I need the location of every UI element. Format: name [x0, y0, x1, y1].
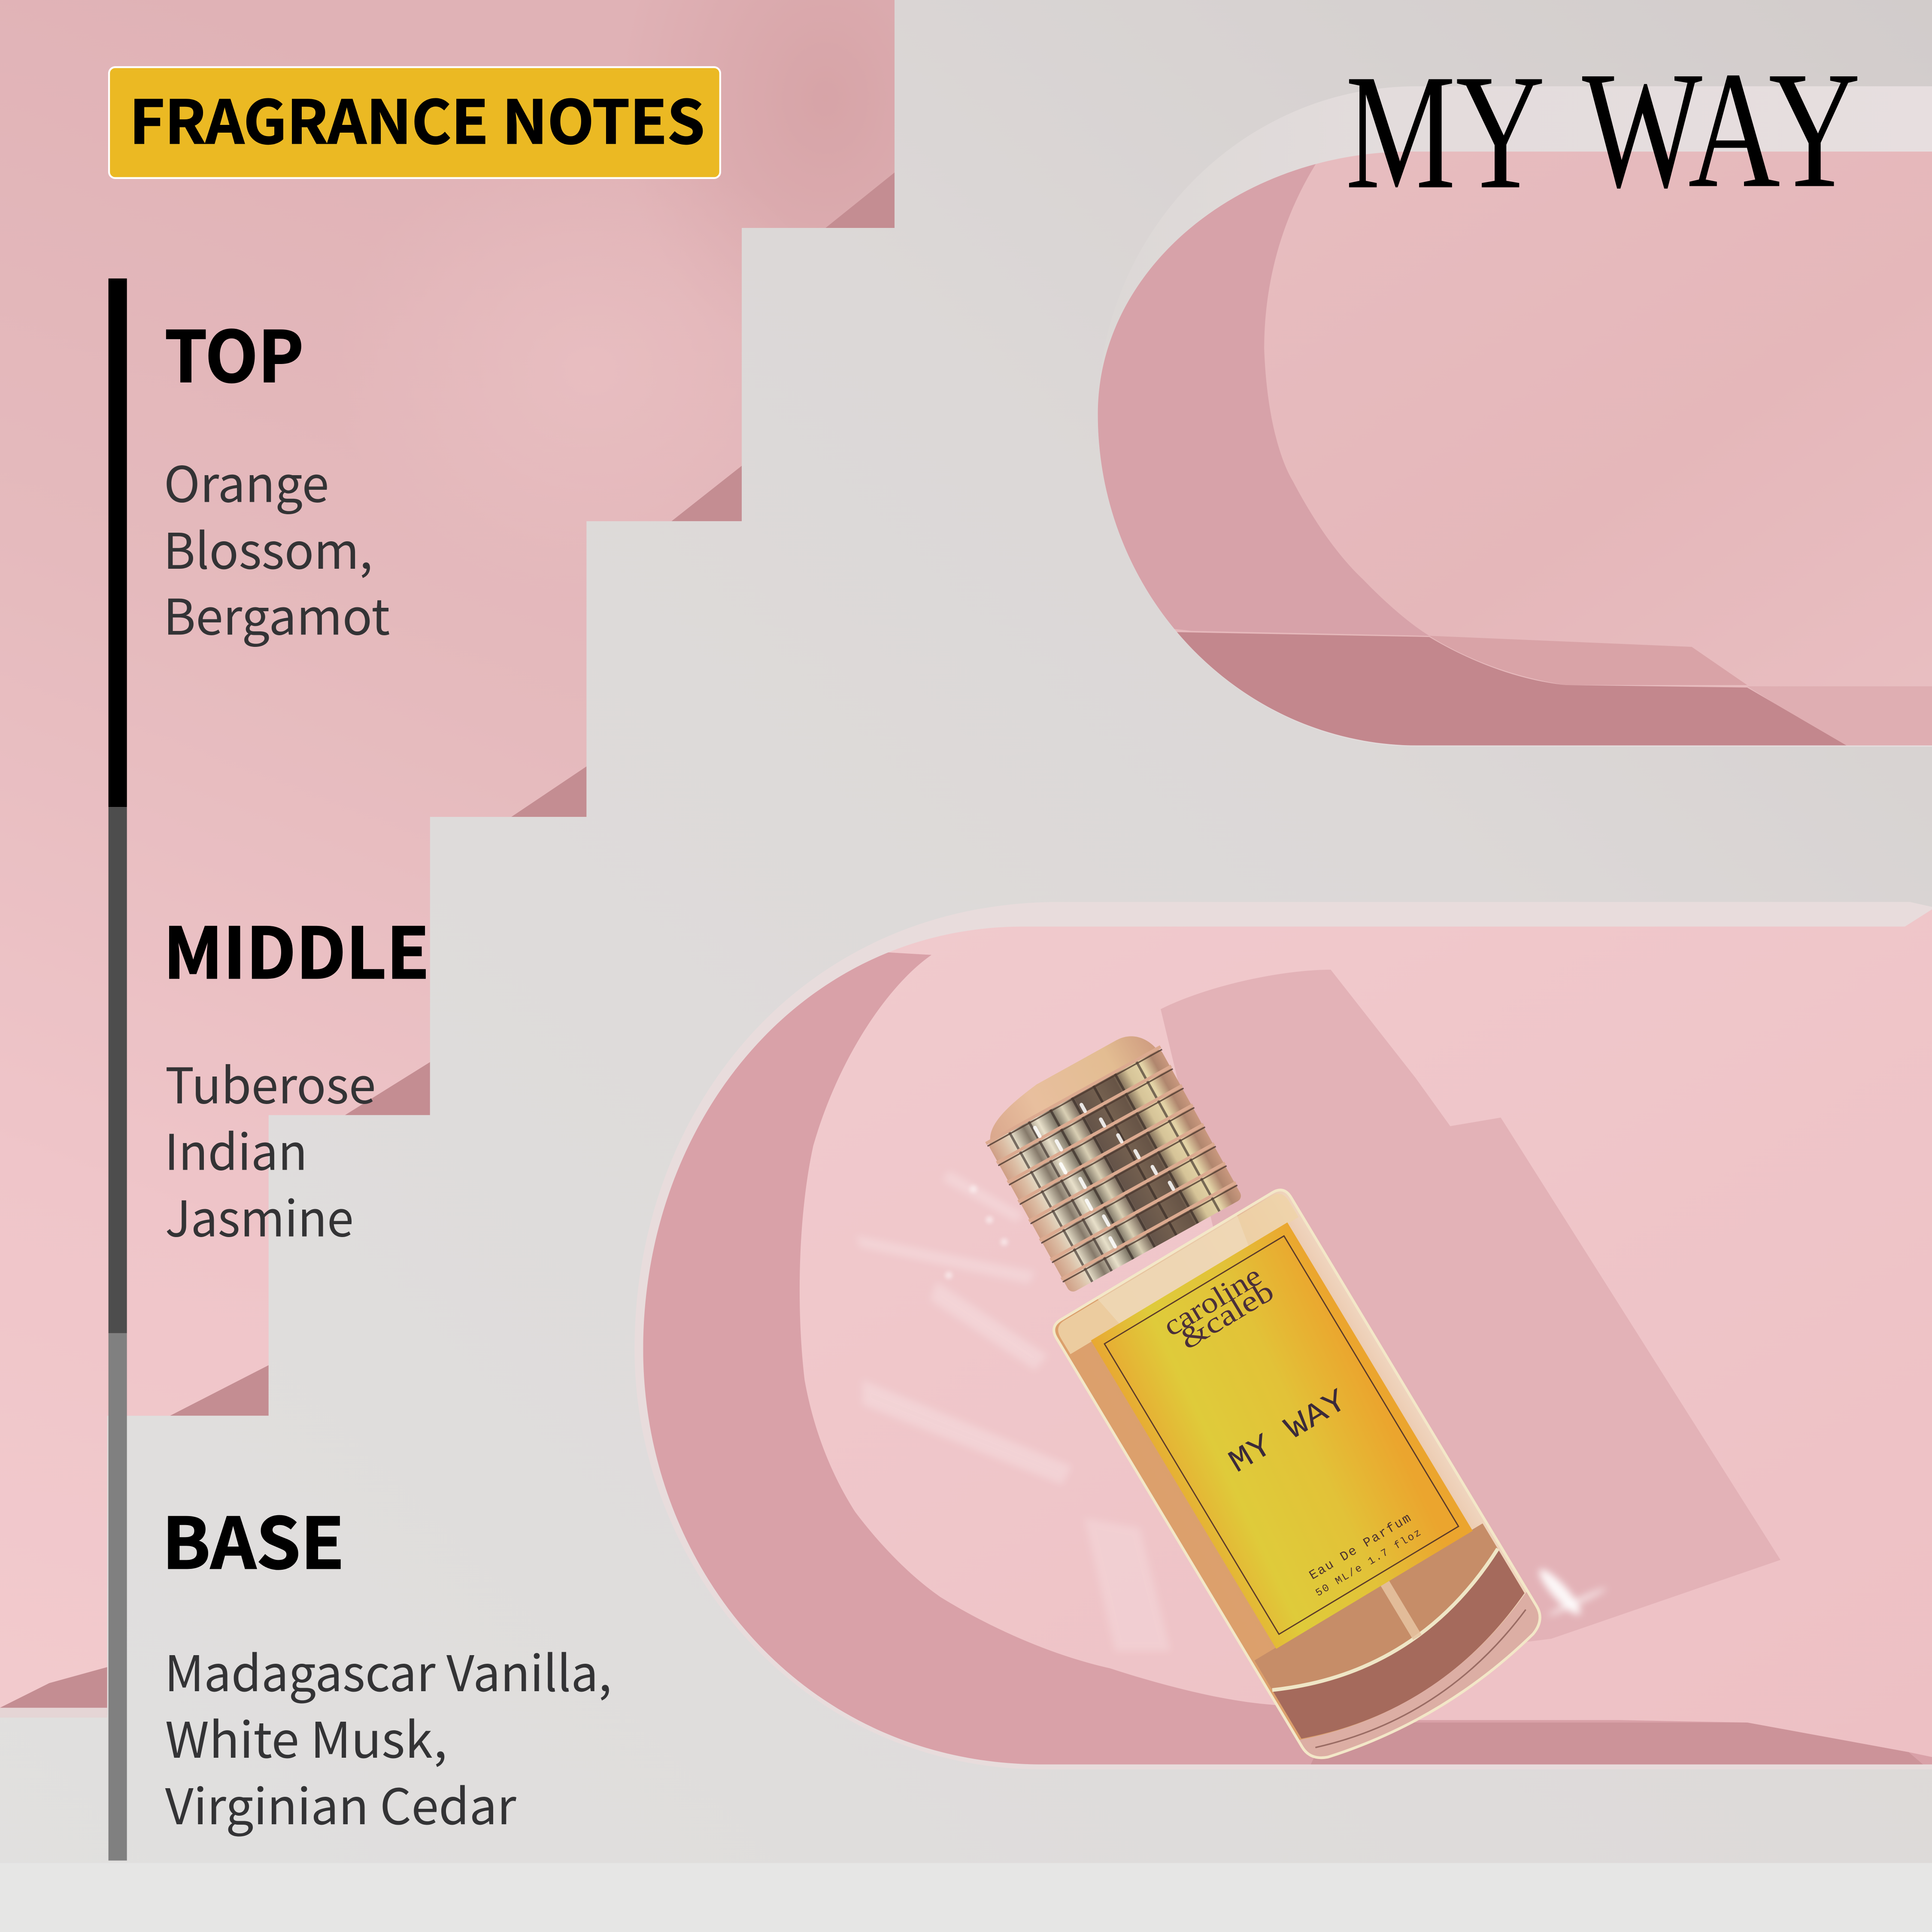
- upper arch mid shadow band: [1429, 636, 1747, 685]
- bottle label: [1091, 1222, 1473, 1649]
- brand name second line: &caleb: [1174, 1274, 1279, 1356]
- section: base notes: [162, 1487, 612, 1839]
- cap rib lines: [986, 1047, 1236, 1279]
- lower arch crescent shadow: [616, 937, 1932, 1786]
- foam left edge highlight: [0, 1708, 107, 1718]
- bottle neck: [1098, 1215, 1258, 1334]
- middle notes list: Indian: [164, 1113, 307, 1185]
- badge: fragrance notes: [109, 67, 720, 178]
- top notes list: [163, 446, 390, 649]
- upper arch shadows: [1098, 164, 1932, 746]
- middle notes list: Jasmine: [165, 1180, 354, 1251]
- label volume: 50 ML/e 1.7 floz: [1314, 1527, 1423, 1599]
- label inner frame: [1104, 1236, 1459, 1634]
- label type: Eau De Parfum: [1307, 1511, 1414, 1583]
- section: middle notes: [163, 897, 429, 1251]
- dip tube: [1380, 1580, 1422, 1640]
- light glints left: [945, 1185, 1008, 1279]
- top notes list: Orange: [164, 446, 329, 517]
- base notes list: [164, 1635, 612, 1839]
- cap rib shadows: [988, 1049, 1237, 1282]
- lower arch bottom shadow band: [1306, 1723, 1932, 1774]
- vertical progress bar: [109, 279, 127, 1861]
- light glare right: [1535, 1565, 1607, 1619]
- paper mottling: [333, 0, 1035, 604]
- bottle dark base band: [1270, 1549, 1541, 1758]
- glass rim highlights: [1270, 1549, 1516, 1715]
- bottle cap: [973, 1023, 1244, 1294]
- lower arch shadows and light: [616, 937, 1932, 1786]
- top notes list: Bergamot: [163, 578, 390, 649]
- step shadows: [0, 173, 895, 1715]
- base notes list: Virginian Cedar: [165, 1768, 516, 1839]
- heading: base: BASE: [162, 1487, 344, 1589]
- upper arch lit floor: [1098, 152, 1932, 746]
- upper arch cut-out: [1060, 86, 1932, 764]
- bottle pale base: [1294, 1592, 1555, 1779]
- lower arch cut-out: [616, 902, 1932, 1786]
- brand name: caroline: [1157, 1259, 1267, 1343]
- foam bottom strip: [0, 1863, 1932, 1932]
- liquid below label: [1255, 1523, 1516, 1715]
- base notes list: White Musk,: [165, 1701, 447, 1772]
- logo: MY WAY: [1346, 37, 1861, 223]
- base notes list: Madagascar Vanilla,: [164, 1635, 612, 1706]
- upper arch crescent shadow: [1098, 164, 1429, 636]
- light rays left: [856, 1171, 1072, 1485]
- lower arch lit floor: [643, 909, 1932, 1765]
- logo word MY: MY: [1346, 40, 1545, 223]
- perfume bottle: [1048, 1184, 1557, 1780]
- bottle shadow: [1161, 970, 1780, 1651]
- upper arch inner wall: [1098, 86, 1932, 747]
- cap dome: [976, 1025, 1160, 1146]
- heading: middle: MIDDLE: [163, 897, 429, 999]
- upper arch dark shadow band: [1177, 632, 1846, 745]
- light glow lower: [1084, 1518, 1171, 1651]
- upper arch lower right shade: [1747, 686, 1932, 752]
- cap vertical grooves: [1009, 1061, 1219, 1282]
- middle notes list: [164, 1047, 376, 1251]
- bottle shoulder pale glass: [1054, 1190, 1298, 1354]
- lower arch inner wall: [634, 902, 1932, 1769]
- bottle glass body: [1048, 1184, 1557, 1780]
- cap highlights: [1035, 1083, 1184, 1253]
- middle notes list: Tuberose: [165, 1047, 376, 1118]
- label title: MY WAY: [1223, 1383, 1354, 1481]
- top notes list: Blossom,: [163, 512, 373, 583]
- cap ribbed body: [987, 1047, 1243, 1294]
- section: top notes: [163, 301, 390, 649]
- badge text: FRAGRANCE NOTES: [129, 75, 705, 161]
- heading: top: TOP: [164, 301, 304, 403]
- background pink paper: [0, 0, 896, 1725]
